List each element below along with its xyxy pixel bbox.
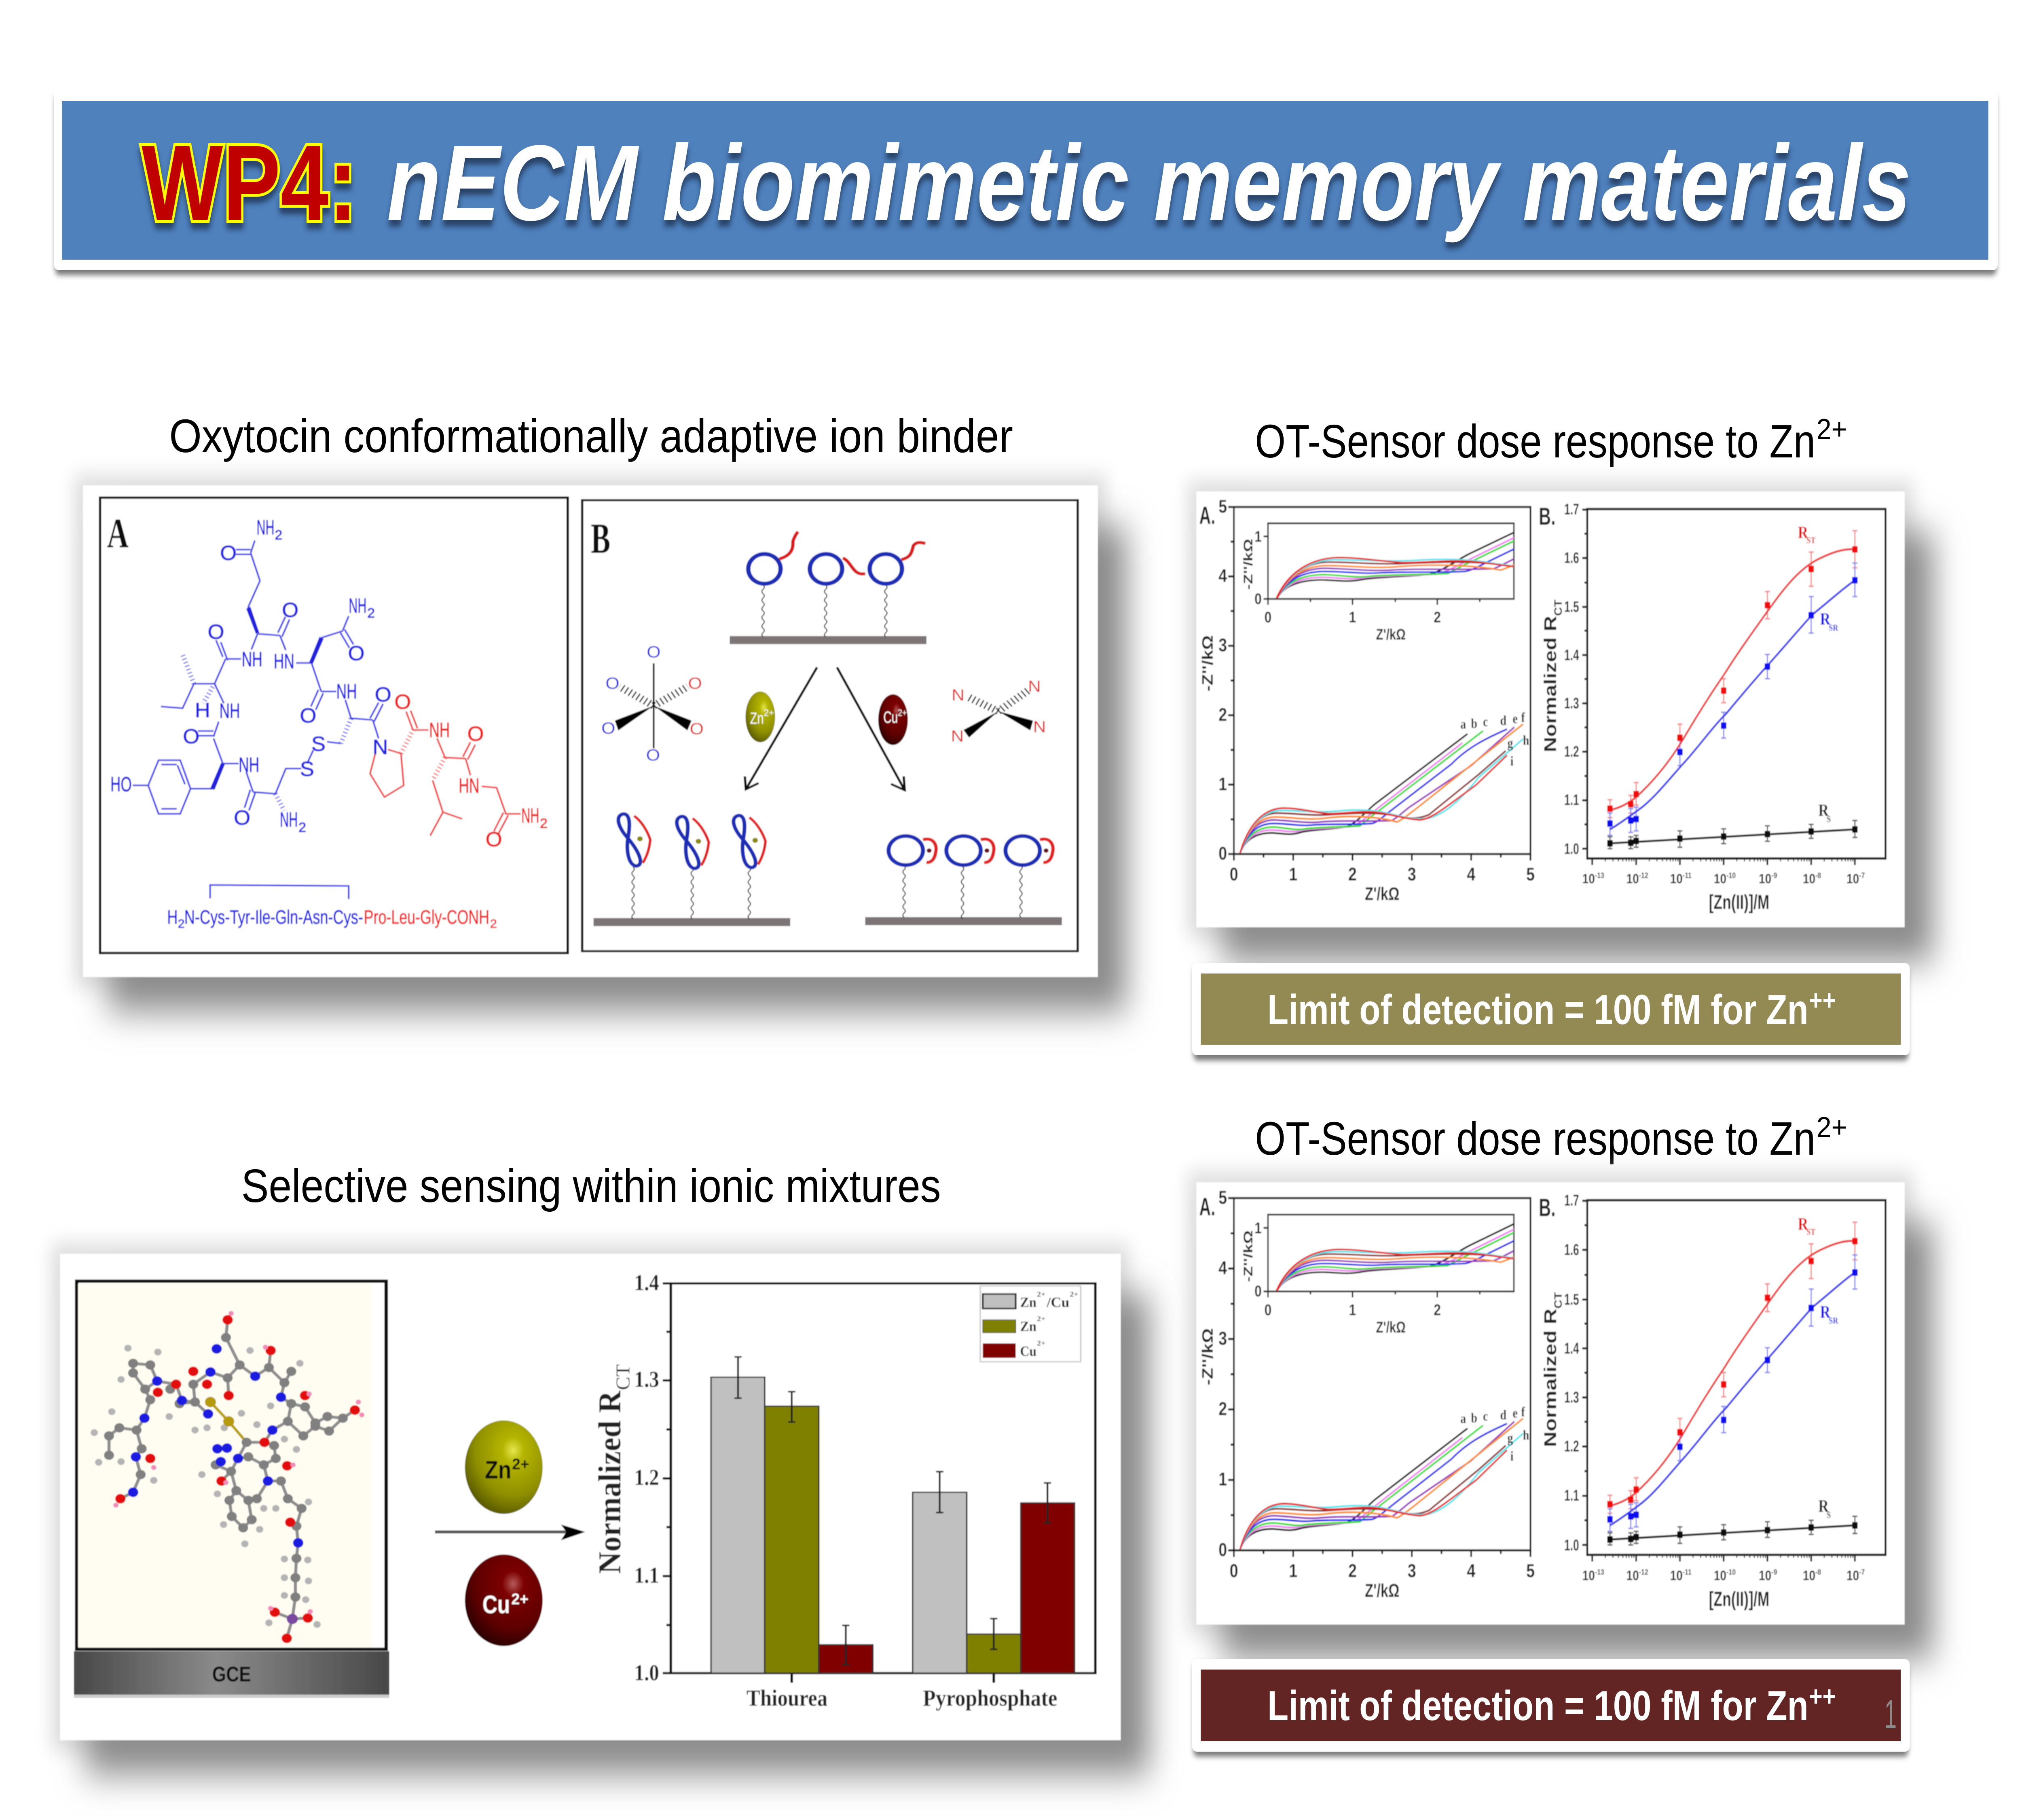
chart A: impedance curves: 3 (1218, 635, 1227, 655)
axis labels (592, 1270, 1058, 1711)
icon: Zn ion: 2+ (764, 708, 774, 718)
chart A: impedance curves: c (1483, 714, 1488, 729)
axis labels: Thiourea (747, 1685, 827, 1711)
blue labels: 2 (367, 606, 375, 621)
axis labels: Pyrophosphate (923, 1685, 1058, 1711)
page number: 1 (1885, 1692, 1897, 1737)
molecule box (77, 1281, 386, 1649)
panel: bottom dose response charts (1196, 1173, 1905, 1625)
blue labels: NH (220, 700, 240, 723)
box A: oxytocin chemical structure (100, 497, 568, 953)
top surface with open peptide (730, 532, 926, 644)
blue labels: O (208, 620, 224, 643)
icon: Cu ion (878, 694, 908, 745)
chart A: impedance curves: 5 (1218, 496, 1227, 516)
icon: Zn sphere (465, 1420, 543, 1514)
bottom-left surface with Zn-folded peptide (594, 814, 790, 926)
red labels: O (394, 690, 411, 714)
legend (980, 1286, 1081, 1362)
icon: Cu ion: 2+ (898, 708, 907, 718)
blue labels: O (282, 599, 298, 622)
callout: detection limit maroon: ++ (1809, 1680, 1836, 1712)
blue labels: O (300, 704, 316, 728)
heading: selective sensing: Selective sensing within ionic mixtures (241, 1160, 941, 1212)
octahedral O coordination: O (647, 643, 661, 661)
octahedral O coordination: O (601, 719, 615, 737)
chart B: normalized RCT dose response: SR (1829, 623, 1838, 633)
legend: Zn (1020, 1295, 1036, 1310)
axis labels: 1.3 (634, 1367, 659, 1392)
electrode bar GCE (74, 1651, 389, 1698)
icon: Zn sphere: Zn (485, 1456, 511, 1484)
callout: detection limit olive: ++ (1809, 984, 1836, 1016)
red labels: NH (521, 804, 539, 827)
icon: Zn sphere: 2+ (512, 1456, 529, 1473)
chart B: normalized RCT dose response: 1.7 (1564, 501, 1579, 518)
blue bonds (133, 541, 383, 814)
chart B: normalized RCT dose response: 10 (1626, 871, 1639, 887)
chart B: normalized RCT dose response: 1.2 (1564, 743, 1579, 760)
icon: Zn ion (746, 692, 775, 742)
chart B copy: normalized RCT dose response: R (1820, 1302, 1831, 1322)
chart A copy: impedance curves: 0 (1230, 1560, 1238, 1581)
chart B: normalized RCT dose response: -11 (1683, 871, 1692, 880)
blue labels: 2 (298, 820, 306, 835)
chart A: impedance curves (1199, 482, 1680, 904)
chart B copy: normalized RCT dose response: 10 (1846, 1568, 1859, 1583)
chart B: normalized RCT dose response: 10 (1582, 871, 1595, 887)
axis labels: Normalized R (592, 1390, 628, 1574)
chart B copy: normalized RCT dose response: 1.2 (1564, 1437, 1579, 1455)
octahedral O coordination (601, 643, 704, 764)
legend: Zn (1020, 1319, 1036, 1335)
icon: Cu sphere: 2+ (511, 1590, 529, 1608)
chart A copy: impedance curves: e (1512, 1405, 1518, 1421)
blue labels: NH (280, 808, 298, 832)
chart A: impedance curves: g (1507, 736, 1513, 751)
axis labels: 1.0 (634, 1660, 659, 1685)
chart A copy: impedance curves (1199, 1173, 1680, 1601)
blue labels: S (300, 758, 314, 781)
chart A copy: impedance curves: a (1460, 1411, 1466, 1426)
panel: top dose response charts (1196, 482, 1905, 927)
chart A: impedance curves: 0 (1265, 609, 1271, 626)
callout: detection limit olive: Limit of detection = 100 fM for Zn (1267, 986, 1808, 1033)
chart A: impedance curves: 4 (1467, 864, 1476, 885)
chart B copy: normalized RCT dose response: 1.7 (1564, 1191, 1579, 1209)
chart A copy: impedance curves: f (1521, 1404, 1525, 1420)
chart A: impedance curves: 4 (1218, 565, 1227, 586)
chart B copy: normalized RCT dose response: -12 (1639, 1568, 1648, 1577)
chart A: impedance curves: A. (1199, 502, 1215, 529)
chart B: normalized RCT dose response: R (1820, 610, 1831, 629)
chart A copy: impedance curves: g (1507, 1430, 1513, 1445)
chart A: impedance curves: 2 (1348, 864, 1357, 885)
chart B copy: normalized RCT dose response: -8 (1815, 1568, 1821, 1577)
axis labels: 1.2 (634, 1465, 659, 1490)
chart A copy: impedance curves: 1 (1289, 1560, 1297, 1581)
heading: oxytocin: Oxytocin conformationally adaptive ion binder (169, 410, 1013, 462)
peptide sequence: N-Cys-Tyr-Ile-Gln-Asn-Cys- (184, 907, 363, 928)
chart A copy: impedance curves: 3 (1408, 1560, 1416, 1581)
red labels: 2 (540, 816, 548, 831)
chart B: normalized RCT dose response: 1.3 (1564, 695, 1579, 712)
tetrahedral N coordination (951, 677, 1046, 745)
title banner (54, 88, 1998, 275)
chart A copy: impedance curves: -Z''/kΩ (1199, 1328, 1216, 1385)
chart A copy: impedance curves: 3 (1218, 1328, 1227, 1349)
legend: 2+ (1037, 1315, 1045, 1323)
blue labels: NH (336, 680, 357, 703)
legend: 2+ (1037, 1291, 1045, 1299)
panel: oxytocin structure and binding scheme (83, 485, 1098, 977)
chart A copy: impedance curves: 4 (1218, 1257, 1227, 1278)
chart B copy: normalized RCT dose response: -10 (1726, 1568, 1736, 1577)
chart B copy: normalized RCT dose response: S (1827, 1510, 1831, 1520)
chart B copy: normalized RCT dose response: 1.3 (1564, 1388, 1579, 1406)
chart A copy: impedance curves: 0 (1265, 1301, 1271, 1319)
red labels: HN (459, 775, 479, 798)
chart B: normalized RCT dose response: 10 (1803, 871, 1815, 887)
tetrahedral N coordination: N (1033, 718, 1046, 736)
chart B copy: normalized RCT dose response: 1.5 (1564, 1291, 1579, 1308)
axis labels: 1.1 (634, 1563, 659, 1588)
chart B: normalized RCT dose response: 1.5 (1564, 598, 1579, 616)
blue labels: HN (274, 650, 294, 673)
chart B: normalized RCT dose response: 10 (1714, 871, 1726, 887)
chart A: impedance curves: d (1500, 713, 1506, 728)
chart A copy: impedance curves: d (1500, 1407, 1507, 1422)
chart B copy: normalized RCT dose response: B. (1539, 1194, 1556, 1222)
chart B copy: normalized RCT dose response: 10 (1670, 1568, 1683, 1583)
chart B: normalized RCT dose response: 1.0 (1564, 840, 1579, 857)
chart B copy: normalized RCT dose response: Normalized R (1541, 1309, 1560, 1447)
chart B copy: normalized RCT dose response: CT (1552, 1292, 1564, 1309)
panel shadow: oxytocin (74, 475, 1127, 1012)
red labels: O (486, 828, 502, 851)
legend: 2+ (1037, 1340, 1045, 1348)
blue labels: NH (239, 753, 259, 777)
chart A copy: impedance curves: 1 (1218, 1469, 1227, 1490)
chart B copy: normalized RCT dose response: SR (1829, 1316, 1838, 1326)
chart B copy: normalized RCT dose response: 1.1 (1564, 1486, 1579, 1504)
chart A: impedance curves: 1 (1218, 774, 1227, 794)
red labels: O (467, 722, 484, 745)
blue labels: 2 (275, 528, 282, 543)
wedge bonds (210, 607, 324, 790)
title prefix: WP4: (142, 123, 357, 243)
chart B: normalized RCT dose response (1539, 501, 1886, 913)
chart A: impedance curves: b (1471, 716, 1477, 731)
chart A: impedance curves: 2 (1218, 704, 1227, 725)
bar chart: normalized RCT (592, 1270, 1096, 1711)
chart A copy: impedance curves: 0 (1254, 1282, 1262, 1300)
chart A: impedance curves: 3 (1408, 864, 1416, 885)
icon: Zn ion: Zn (750, 709, 764, 727)
chart A: impedance curves: 1 (1254, 528, 1262, 545)
peptide sequence: H (167, 907, 178, 928)
chart A: impedance curves: e (1512, 711, 1518, 726)
blue labels: NH (349, 594, 366, 618)
chart A copy: impedance curves: 5 (1218, 1187, 1227, 1208)
letter B: B (591, 515, 610, 562)
heading: dose response bottom: OT-Sensor dose response to Zn (1255, 1112, 1815, 1165)
molecule ball and stick model (94, 1313, 362, 1638)
chart A: impedance curves: i (1510, 753, 1514, 769)
chart A copy: impedance curves: 0 (1218, 1539, 1227, 1560)
chart B copy: normalized RCT dose response: -7 (1859, 1568, 1865, 1577)
chart B: normalized RCT dose response: [Zn(II)]/M (1709, 891, 1769, 913)
heading: dose response bottom: 2+ (1817, 1111, 1847, 1144)
chart A copy: impedance curves: Z'/kΩ (1376, 1318, 1406, 1336)
chart B copy: normalized RCT dose response: 10 (1759, 1568, 1771, 1583)
chart B: normalized RCT dose response: -13 (1595, 871, 1604, 880)
chart A: impedance curves: f (1521, 710, 1525, 725)
chart A copy: impedance curves: 5 (1526, 1560, 1535, 1581)
chart A: impedance curves: 0 (1230, 864, 1238, 885)
panel: selective sensing (60, 1254, 1121, 1740)
legend: /Cu (1046, 1295, 1069, 1310)
chart A: impedance curves: 1 (1349, 609, 1356, 626)
chart A: impedance curves: 1 (1289, 864, 1297, 885)
axes frame (663, 1283, 1096, 1683)
peptide sequence: 2 (178, 917, 185, 931)
chart B copy: normalized RCT dose response: -13 (1595, 1568, 1604, 1577)
chart A copy: impedance curves: 2 (1434, 1301, 1441, 1319)
chart A: impedance curves: a (1460, 716, 1466, 732)
blue labels: O (183, 725, 199, 748)
chart B: normalized RCT dose response: -7 (1859, 871, 1865, 880)
bars (711, 1377, 1074, 1673)
chart B copy: normalized RCT dose response: R (1818, 1496, 1829, 1516)
chart B: normalized RCT dose response: ST (1806, 536, 1816, 545)
chart A copy: impedance curves: 2 (1348, 1560, 1357, 1581)
tetrahedral N coordination: N (951, 727, 964, 745)
panel shadow: bottom charts (1188, 1172, 1933, 1659)
chart A copy: impedance curves: c (1483, 1408, 1488, 1424)
blue labels: NH (242, 648, 262, 671)
hashed bonds (183, 654, 351, 811)
blue labels: O (348, 642, 364, 665)
chart A copy: impedance curves: b (1471, 1410, 1477, 1426)
axis labels: 1.4 (634, 1270, 659, 1295)
chart B: normalized RCT dose response: 1.1 (1564, 791, 1579, 808)
chart A copy: impedance curves: Z'/kΩ (1365, 1580, 1400, 1601)
bottom-right surface with Cu-bound peptide (865, 836, 1062, 925)
chart A: impedance curves: h (1523, 732, 1529, 748)
chart B copy: normalized RCT dose response: 10 (1714, 1568, 1726, 1583)
chart A: impedance curves: 0 (1218, 843, 1227, 863)
tetrahedral N coordination: N (952, 686, 964, 704)
peptide sequence: Pro-Leu-Gly-CONH (364, 907, 489, 928)
chart A: impedance curves: 5 (1526, 864, 1535, 885)
icon: Cu sphere: Cu (482, 1590, 510, 1619)
heading: dose response top: 2+ (1817, 413, 1847, 446)
error bars (734, 1357, 1051, 1665)
chart A copy: impedance curves: 2 (1218, 1399, 1227, 1419)
chart A: impedance curves: Z'/kΩ (1376, 626, 1406, 643)
blue labels: O (234, 806, 250, 830)
chart B: normalized RCT dose response: -8 (1815, 871, 1821, 880)
legend: Cu (1020, 1344, 1036, 1359)
electrode bar GCE: GCE (212, 1662, 251, 1686)
octahedral O coordination: O (690, 720, 704, 738)
chart B: normalized RCT dose response: -9 (1771, 871, 1777, 880)
legend: 2+ (1070, 1291, 1079, 1299)
chart B copy: normalized RCT dose response: ST (1806, 1227, 1816, 1237)
blue labels: O (375, 683, 391, 706)
octahedral O coordination: O (605, 674, 620, 692)
chart B: normalized RCT dose response: 10 (1846, 871, 1859, 887)
tetrahedral N coordination: N (1028, 677, 1041, 695)
chart A: impedance curves: 0 (1254, 590, 1262, 607)
blue labels: O (220, 542, 237, 565)
chart B: normalized RCT dose response: Normalized R (1541, 616, 1560, 752)
panel shadow: selective sensing (52, 1244, 1149, 1775)
arrow (435, 1524, 585, 1540)
callout: detection limit maroon (1192, 1659, 1910, 1757)
peptide sequence: 2 (490, 917, 497, 931)
chart B copy: normalized RCT dose response: -9 (1771, 1568, 1777, 1577)
chart A copy: impedance curves: 1 (1349, 1301, 1356, 1319)
blue labels: S (311, 732, 326, 756)
blue labels: NH (256, 516, 275, 539)
blue labels: H (195, 699, 210, 722)
chart B: normalized RCT dose response: R (1818, 801, 1829, 820)
blue labels: N (372, 736, 388, 759)
chart A copy: impedance curves: -Z''/kΩ (1241, 1230, 1255, 1282)
chart A copy: impedance curves: 4 (1467, 1560, 1476, 1581)
chart B copy: normalized RCT dose response: 10 (1803, 1568, 1815, 1583)
letter A: A (107, 510, 129, 557)
chart B copy: normalized RCT dose response: 1.0 (1564, 1536, 1579, 1554)
box B: binding scheme (582, 500, 1078, 951)
chart A copy: impedance curves: h (1523, 1427, 1529, 1443)
callout: detection limit olive (1192, 963, 1910, 1060)
chart B: normalized RCT dose response: -12 (1639, 871, 1648, 880)
chart B: normalized RCT dose response: R (1798, 523, 1808, 542)
chart B copy: normalized RCT dose response: 10 (1582, 1568, 1595, 1583)
chart B: normalized RCT dose response: 10 (1670, 871, 1683, 887)
chart B copy: normalized RCT dose response: R (1798, 1214, 1808, 1234)
callout: detection limit maroon: Limit of detection = 100 fM for Zn (1267, 1682, 1808, 1729)
icon: Cu sphere (465, 1555, 543, 1646)
chart B: normalized RCT dose response: 10 (1759, 871, 1771, 887)
chart B: normalized RCT dose response: 1.4 (1564, 647, 1579, 664)
red labels (394, 690, 548, 851)
chart B copy: normalized RCT dose response: 1.4 (1564, 1340, 1579, 1357)
peptide sequence (167, 907, 497, 931)
chart B: normalized RCT dose response: S (1827, 815, 1831, 824)
blue labels: HO (110, 773, 132, 796)
red bonds (370, 711, 520, 836)
chart B copy: normalized RCT dose response: [Zn(II)]/M (1709, 1587, 1769, 1610)
chart B: normalized RCT dose response: -10 (1726, 871, 1736, 880)
chart B copy: normalized RCT dose response (1539, 1191, 1886, 1610)
disulfide bracket (210, 885, 349, 899)
chart A copy: impedance curves: A. (1199, 1193, 1215, 1221)
arrows (745, 667, 905, 790)
title text: nECM biomimetic memory materials (387, 123, 1911, 243)
blue labels (110, 516, 391, 835)
chart B copy: normalized RCT dose response: 10 (1626, 1568, 1639, 1583)
panel shadow: top charts (1188, 481, 1933, 962)
chart B: normalized RCT dose response: B. (1539, 503, 1556, 531)
chart B copy: normalized RCT dose response: -11 (1683, 1568, 1692, 1577)
chart A copy: impedance curves: 1 (1254, 1219, 1262, 1237)
heading: dose response top: OT-Sensor dose response to Zn (1255, 415, 1815, 468)
octahedral O coordination: O (688, 674, 702, 692)
chart A: impedance curves: -Z''/kΩ (1199, 635, 1216, 692)
chart B: normalized RCT dose response: 1.6 (1564, 549, 1579, 567)
electrode with molecule and ions (74, 1281, 585, 1698)
red labels: NH (429, 719, 450, 742)
axis labels: CT (612, 1364, 634, 1390)
chart A: impedance curves: -Z''/kΩ (1241, 539, 1255, 590)
chart B: normalized RCT dose response: CT (1552, 599, 1564, 616)
chart A: impedance curves: 2 (1434, 609, 1441, 626)
octahedral O coordination: O (646, 746, 660, 764)
chart A copy: impedance curves: i (1510, 1448, 1514, 1464)
icon: Cu ion: Cu (884, 708, 898, 726)
chart B copy: normalized RCT dose response: 1.6 (1564, 1241, 1579, 1259)
chart A: impedance curves: Z'/kΩ (1365, 883, 1400, 904)
